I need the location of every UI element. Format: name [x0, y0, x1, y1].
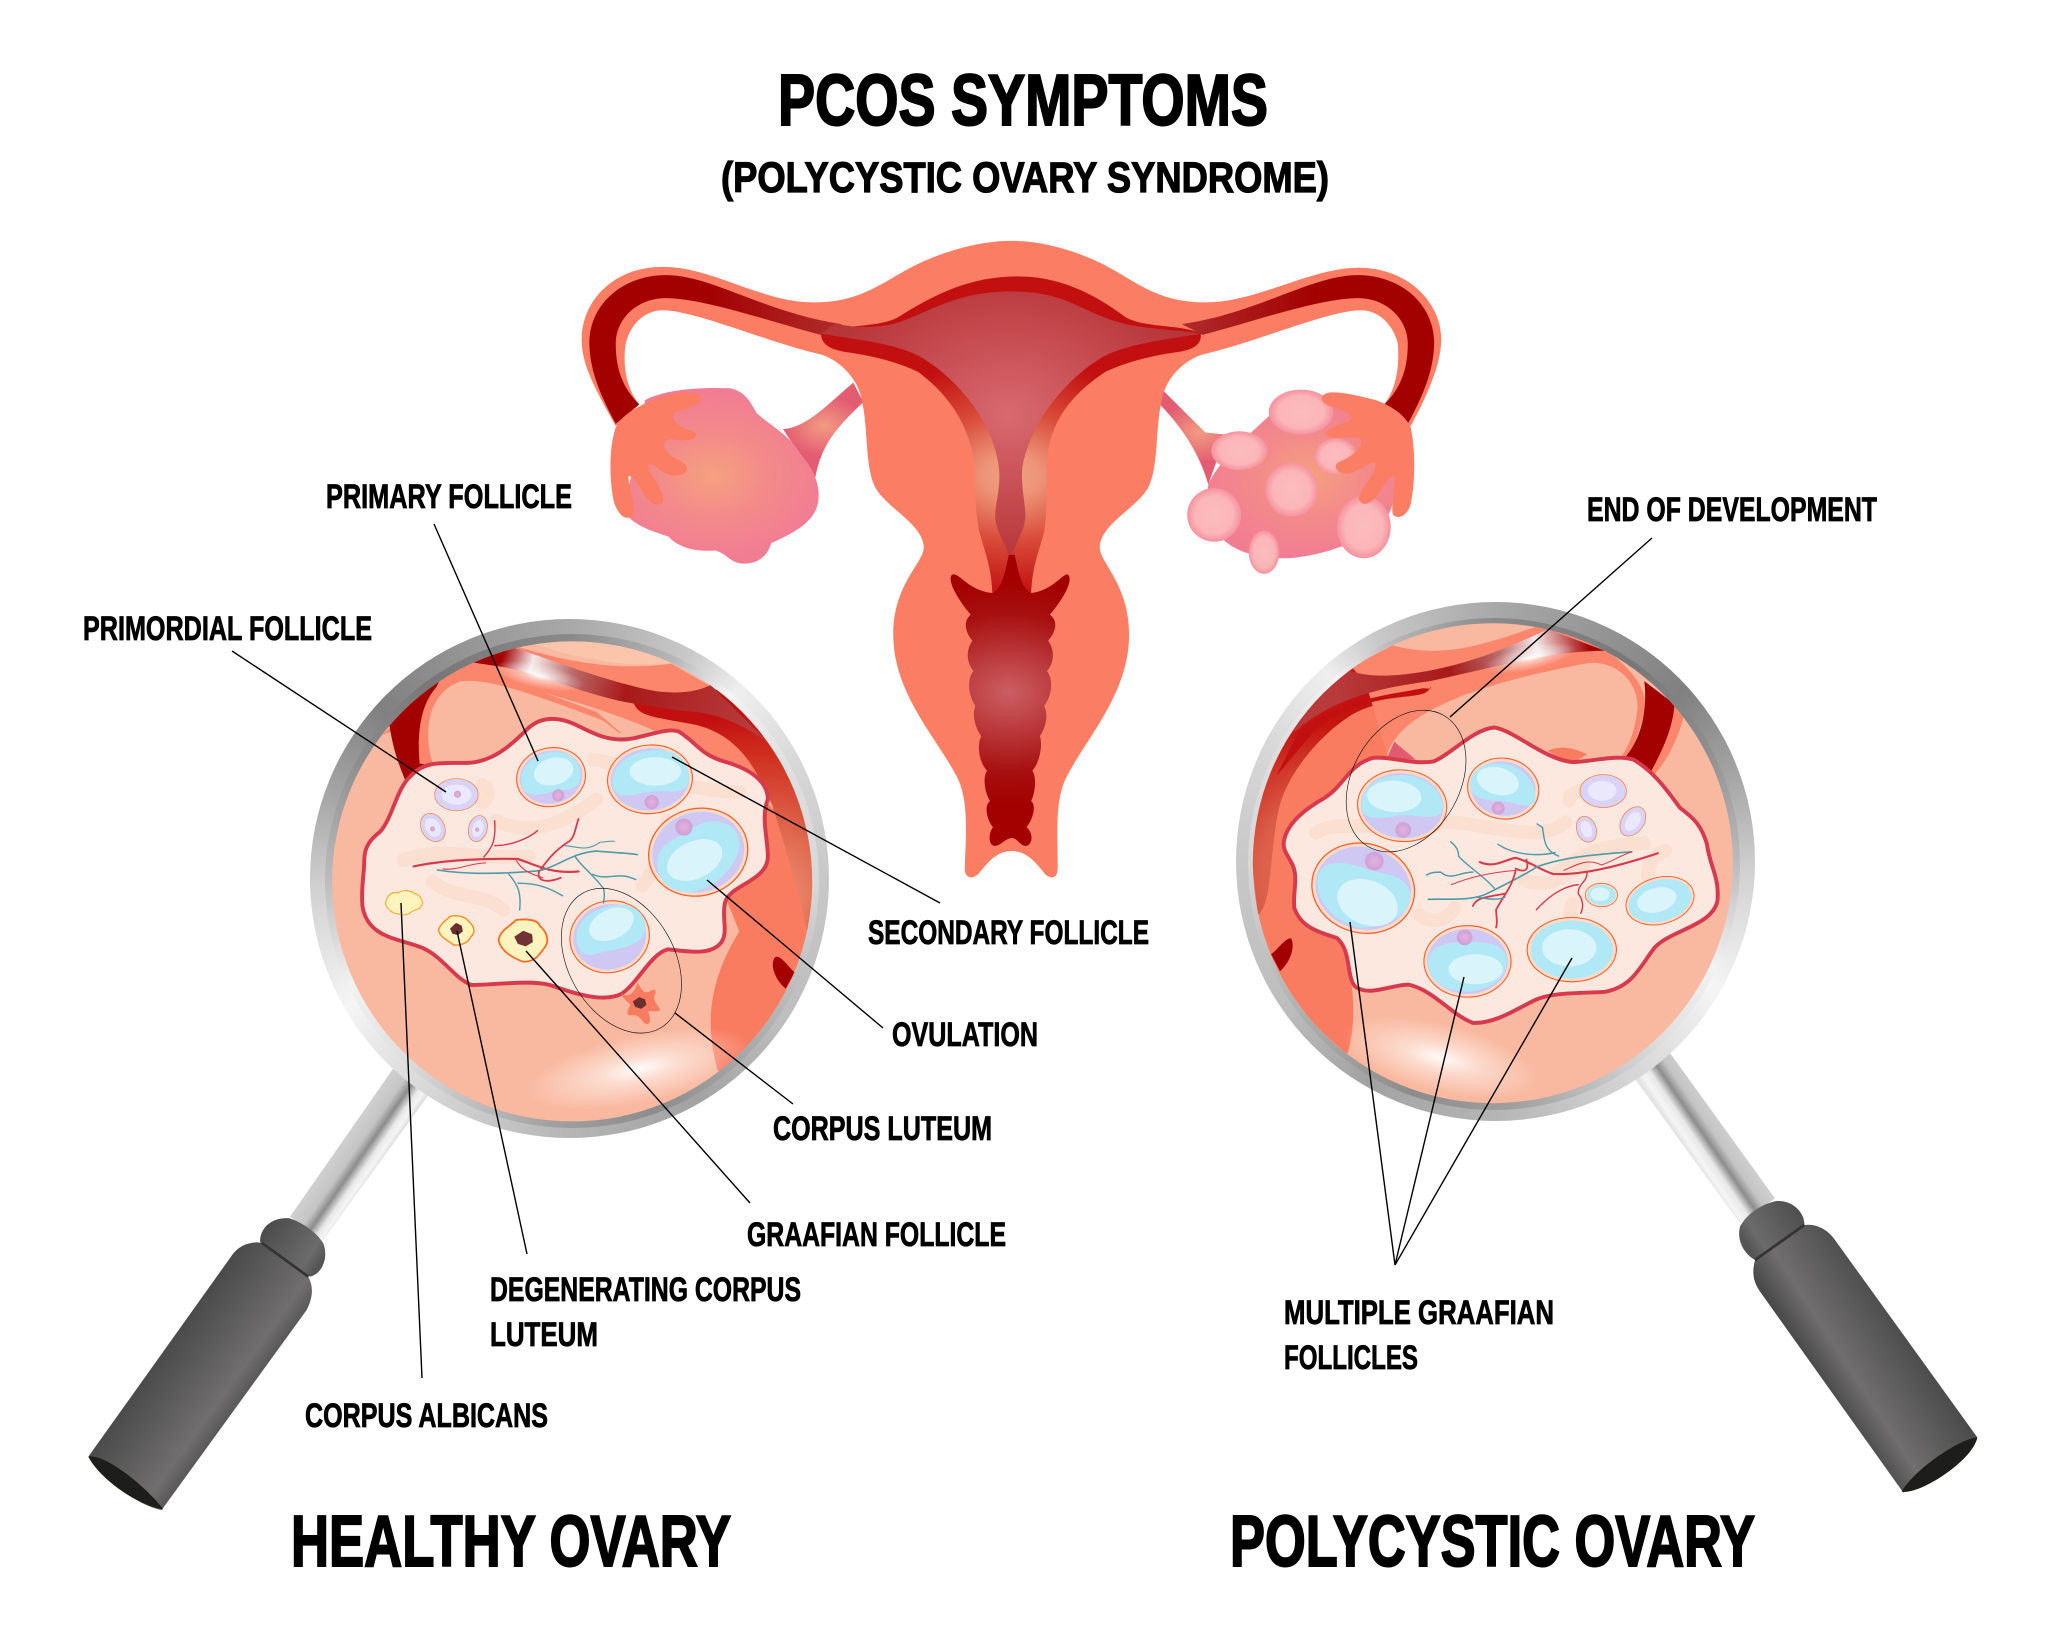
- body of uterus and tubes: [582, 241, 1441, 877]
- ovary tissue outline: [1284, 727, 1718, 1023]
- stroma shading: [1316, 789, 1666, 920]
- polycystic ovary magnifier lens: [1252, 623, 1733, 1104]
- peach ovary lobe: [428, 681, 621, 767]
- subtitle: (POLYCYSTIC OVARY SYNDROME): [721, 154, 1329, 202]
- right salmon tissue: [710, 804, 812, 1071]
- follicle upper left: [1355, 766, 1450, 845]
- primary follicle: [516, 747, 586, 808]
- small follicles right: [1573, 775, 1651, 845]
- follicle bottom right: [1527, 917, 1616, 982]
- fallopian tube right: [1182, 275, 1434, 424]
- blood vessels: [414, 819, 637, 910]
- left lens inner ring: [325, 634, 819, 1128]
- label: graafian follicle: GRAAFIAN FOLLICLE: [747, 1216, 1006, 1254]
- heading: polycystic ovary: POLYCYSTIC OVARY: [1230, 1502, 1755, 1582]
- polycystic ovary: [1187, 390, 1414, 574]
- glare top: [1482, 636, 1578, 680]
- glare bottom: [540, 1032, 744, 1105]
- follicle right: [1621, 869, 1699, 932]
- degenerating corpus luteum: [439, 916, 474, 945]
- right lens inner ring: [1248, 618, 1740, 1110]
- corpus albicans: [386, 891, 422, 915]
- follicle upper middle: [1463, 752, 1544, 825]
- label: end of development: END OF DEVELOPMENT: [1587, 491, 1877, 529]
- grouped circle outline: [561, 888, 682, 1034]
- follicle bottom middle: [1424, 926, 1511, 997]
- end of development circle outline: [1322, 689, 1490, 873]
- fimbria dark strip: [1625, 681, 1675, 772]
- red tube end: [1276, 686, 1431, 776]
- glare top: [497, 662, 582, 690]
- ovulation follicle: [648, 808, 748, 897]
- fimbria dark strip: [390, 682, 440, 780]
- healthy ovary: [610, 388, 819, 564]
- right ligament and left ligament: [783, 383, 1226, 485]
- graafian yellow follicle: [499, 919, 547, 962]
- dark spot: [1271, 938, 1293, 971]
- fallopian tube left: [589, 275, 842, 424]
- label: follicles: FOLLICLES: [1284, 1339, 1418, 1377]
- glare bottom: [1335, 1001, 1546, 1115]
- background salmon band: [382, 646, 818, 860]
- uterine cavity: [821, 292, 1201, 556]
- heading: healthy ovary: HEALTHY OVARY: [291, 1502, 731, 1582]
- ligament stub: [1387, 742, 1416, 760]
- label: ovulation: OVULATION: [892, 1016, 1038, 1054]
- primordial follicle small: [420, 812, 488, 842]
- label: luteum: LUTEUM: [490, 1316, 598, 1354]
- uterine wall band: [634, 689, 829, 931]
- corpus luteum star: [621, 983, 661, 1024]
- wall band: [1248, 661, 1431, 915]
- uterus illustration: [582, 241, 1441, 877]
- uterine wall: [821, 276, 1201, 593]
- label: degenerating corpus: DEGENERATING CORPUS: [490, 1271, 801, 1309]
- ovary tissue outline: [362, 719, 768, 998]
- label: primordial follicle: PRIMORDIAL FOLLICLE: [83, 610, 372, 648]
- label: secondary follicle: SECONDARY FOLLICLE: [868, 914, 1149, 952]
- salmon top band: [1351, 624, 1646, 758]
- blood vessels: [1426, 824, 1658, 927]
- title: PCOS SYMPTOMS: [778, 61, 1268, 141]
- right lens outer ring: [1236, 602, 1755, 1121]
- left lens outer ring: [310, 619, 829, 1138]
- peach ovary lobe: [1387, 663, 1638, 761]
- secondary follicle: [607, 744, 693, 814]
- healthy ovary magnifier lens: [332, 641, 812, 1122]
- follicle tiny: [1585, 883, 1617, 907]
- primordial follicle: [435, 779, 478, 811]
- uterine tube highlight: [468, 647, 775, 749]
- label: corpus luteum: CORPUS LUTEUM: [773, 1110, 992, 1148]
- stroma shading: [404, 760, 739, 910]
- label: corpus albicans: CORPUS ALBICANS: [305, 1397, 548, 1435]
- salmon left tissue: [1244, 683, 1451, 1054]
- graafian bottom follicle: [569, 900, 650, 974]
- follicle large left: [1302, 832, 1425, 945]
- leader lines: [232, 524, 1652, 1378]
- label: primary follicle: PRIMARY FOLLICLE: [326, 478, 572, 516]
- dark spot: [773, 957, 795, 989]
- vagina: [951, 555, 1070, 846]
- uterine tube highlight: [1280, 629, 1605, 740]
- label: multiple graafian: MULTIPLE GRAAFIAN: [1284, 1294, 1554, 1332]
